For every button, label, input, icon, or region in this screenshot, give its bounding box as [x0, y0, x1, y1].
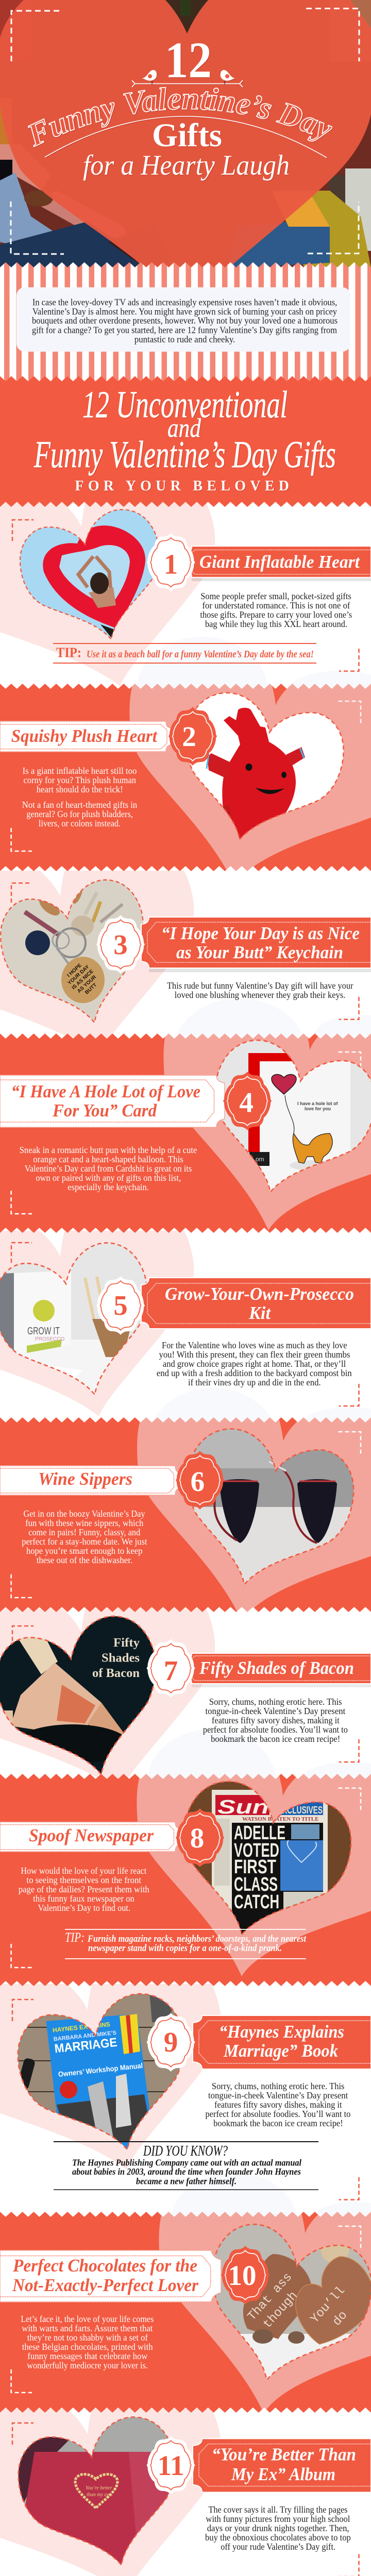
photo: heart chocolates — [206, 2215, 371, 2380]
ribbon title: Perfect Chocolates for the — [12, 2256, 197, 2276]
photo: spoof newspaper: CLASS — [234, 1874, 278, 1895]
body text: and grow choice grapes right at home. That, or they’ll — [163, 1359, 346, 1369]
ribbon — [0, 1075, 225, 1127]
tip callout: newspaper stand with copies for a one-of-a-kind prank. — [88, 1943, 282, 1954]
ribbon title: Spoof Newspaper — [29, 1825, 154, 1845]
photo: Haynes marriage manual: BARBARA AND MIKE’S — [53, 2030, 117, 2043]
headline text: and — [167, 414, 201, 443]
body text: corny for you? This plush human — [24, 775, 136, 785]
photo: grow-it prosecco box: GROW IT — [27, 1326, 60, 1337]
photo: bacon book cover — [0, 1616, 155, 1774]
body text — [22, 766, 137, 828]
badge 6 — [176, 1451, 224, 1510]
photo: heart chocolates: do — [330, 2309, 350, 2329]
photo: spoof newspaper: Sun — [217, 1797, 269, 1818]
body text: heart should do the trick! — [37, 784, 123, 794]
ribbon title — [161, 923, 360, 962]
body text: days or your drunk nights together. Then, — [207, 2523, 349, 2533]
photo: spoof newspaper: FIRST — [234, 1856, 276, 1878]
body text: with funny pictures from your high school — [206, 2514, 350, 2524]
ribbon — [0, 721, 171, 752]
body text: own or paired with any of gifts on this list, — [36, 1173, 181, 1183]
body text: those gifts. Prepare to carry your loved one’s — [200, 609, 352, 620]
body text: you! With this present, they can flex their green thumbs — [159, 1349, 350, 1360]
section 7: Fifty Shades of Bacon — [0, 1607, 371, 1832]
photo: spoof newspaper: ADELLE — [234, 1822, 285, 1844]
body text: How would the love of your life react — [21, 1866, 146, 1876]
headline text: FOR YOUR BELOVED — [75, 478, 289, 494]
body text: funny messages that celebrate how — [27, 2351, 147, 2361]
ribbon title — [12, 2256, 198, 2295]
badge 8: 8 — [190, 1822, 204, 1854]
photo: grow-it prosecco box — [0, 1242, 147, 1395]
hero title — [28, 31, 333, 181]
photo: red album: You’re better — [86, 2485, 112, 2491]
photo: Haynes marriage manual: MARRIAGE — [54, 2036, 118, 2056]
ribbon title: Kit — [248, 1303, 271, 1323]
body text: fun with these wine sippers, which — [25, 1518, 143, 1528]
tip callout: Use it as a beach ball for a funny Valentine’s Day date by the sea! — [87, 649, 314, 660]
photo: spoof newspaper: WATSON BEATEN TO TITLE — [242, 1816, 318, 1822]
body text: tongue-in-cheek Valentine’s Day present — [208, 2090, 348, 2100]
ribbon title: My Ex” Album — [231, 2464, 335, 2484]
photo: wooden keychain — [0, 879, 144, 1023]
tip callout: TIP: — [56, 645, 81, 660]
stripes: top background — [0, 258, 371, 386]
photo: wine sipper glasses — [192, 1428, 355, 1585]
photo: wooden keychain: YOUR DAY — [67, 964, 91, 986]
body text: for understated romance. This is not one of — [202, 600, 350, 611]
arched script title: Funny Valentine’s Day — [28, 87, 333, 148]
did you know callout: became a new father himself. — [136, 2176, 237, 2187]
photo: heart chocolates: You’ll — [308, 2284, 348, 2326]
badge 4: 4 — [239, 1087, 254, 1118]
tip callout — [65, 1929, 307, 1959]
body text: This rude but funny Valentine’s Day gift will have your — [167, 980, 353, 991]
body text: these Belgian chocolates, printed with — [22, 2342, 153, 2352]
body text: especially the keychain. — [68, 1182, 149, 1192]
body text: buy the obnoxious chocolates above to top — [205, 2532, 351, 2543]
badge 4 — [223, 1072, 272, 1130]
ribbon title: Wine Sippers — [38, 1469, 132, 1489]
badge 11 — [146, 2436, 195, 2495]
body text: perfect for a stay-home date. We just — [22, 1536, 147, 1547]
did you know callout — [54, 2141, 318, 2190]
photo: cat card: love for you — [305, 1106, 331, 1111]
photo: bacon book cover: of Bacon — [92, 1667, 140, 1680]
body text — [200, 591, 352, 629]
ribbon — [193, 2015, 371, 2069]
ribbon — [0, 1822, 179, 1852]
section 5: prosecco kit — [0, 1231, 371, 1491]
ribbon title: Grow-Your-Own-Prosecco — [165, 1284, 354, 1304]
section 11: You're Better Than My Ex album — [0, 2409, 371, 2576]
ribbon title: as Your Butt” Keychain — [176, 942, 343, 962]
body text — [205, 2081, 350, 2128]
ribbon title: “Haynes Explains — [219, 2022, 344, 2042]
headline band — [0, 376, 371, 507]
did you know callout: DID YOU KNOW? — [143, 2143, 228, 2159]
intro text: puntastic to rude and cheeky. — [134, 334, 235, 344]
body text: loved one blushing whenever they grab their keys. — [175, 990, 345, 1000]
body text: features fifty savory dishes, making it — [212, 1715, 340, 1725]
photo: wooden keychain: BUTT — [84, 982, 98, 995]
intro text: In case the lovey-dovey TV ads and increasingly expensive roses haven’t made it obvious, — [32, 297, 337, 307]
body text: Sorry, chums, nothing erotic here. This — [212, 2081, 344, 2091]
body text: they’re not too shabby with a set of — [27, 2332, 148, 2343]
tip callout — [53, 643, 316, 664]
intro text: gift for a change? To get you started, here are 12 funny Valentine’s Day gifts ranging from — [32, 325, 337, 335]
body text — [205, 2504, 351, 2552]
ribbon — [0, 2250, 221, 2302]
body text: end up with a fresh addition to the backyard compost bin — [157, 1368, 352, 1378]
body text — [203, 1697, 348, 1744]
photo: red album — [18, 2416, 170, 2565]
photo: woman holding inflatable heart — [20, 509, 158, 639]
ribbon title: Not-Exactly-Perfect Lover — [12, 2275, 198, 2295]
photo: Haynes marriage manual: Owners’ Workshop Manual — [58, 2061, 143, 2078]
section 2: Squishy Plush Heart — [0, 684, 371, 871]
section 9: Haynes book — [0, 1984, 371, 2276]
ribbon title — [212, 2445, 356, 2484]
ribbon — [187, 546, 371, 581]
body text: general? Go for plush bladders, — [26, 809, 133, 819]
photo: wooden keychain: I HOPE — [66, 962, 83, 978]
photo: heart chocolates: That ass — [245, 2270, 295, 2324]
ribbon title: “You’re Better Than — [212, 2445, 356, 2465]
ribbon title: “I Hope Your Day is as Nice — [161, 923, 360, 943]
body text: with warts and farts. Assure them that — [22, 2323, 153, 2333]
hero dashed corner frames — [11, 8, 359, 254]
body text: bag while they lug this XXL heart around. — [205, 619, 347, 629]
branch with two birds — [132, 70, 243, 87]
photo: Haynes marriage manual — [17, 1993, 180, 2149]
badge 5: 5 — [113, 1290, 128, 1321]
ribbon title: Squishy Plush Heart — [11, 726, 158, 746]
body text: orange cat and a heart-shaped balloon. This — [33, 1154, 183, 1164]
ribbon title — [165, 1284, 354, 1323]
photo: Haynes marriage manual: HAYNES EXPLAINS — [52, 2021, 110, 2034]
ribbon title — [12, 1085, 200, 1117]
body text: livers, or colons instead. — [39, 818, 121, 828]
body text — [20, 1145, 197, 1192]
body text: The cover says it all. Try filling the pages — [208, 2504, 347, 2515]
section 3: keychain — [0, 871, 371, 1104]
badge 5 — [96, 1276, 145, 1335]
body text: bookmark the bacon ice cream recipe! — [213, 2118, 343, 2128]
body text — [167, 980, 353, 1000]
body text — [19, 1866, 149, 1913]
body text: if their vines dry up and die in the end. — [188, 1377, 321, 1387]
section 1: Giant Inflatable Heart — [0, 501, 371, 740]
photo: wooden keychain: IS AS NICE — [71, 969, 95, 991]
photo: spoof newspaper: VOTED — [234, 1840, 279, 1861]
tip callout: TIP: — [65, 1930, 85, 1945]
photo: cat card: I have a hole lot of — [297, 1101, 339, 1106]
headline text — [33, 384, 336, 494]
intro text: Valentine’s Day is almost here. You might have grown sick of burning your cash on pricey — [32, 306, 337, 316]
photo: spoof newspaper — [187, 1781, 351, 1935]
photo: spoof newspaper: CATCH — [234, 1891, 279, 1913]
did you know callout: The Haynes Publishing Company came out with an actual manual — [72, 2157, 301, 2167]
hero heart overlay — [0, 0, 371, 267]
intro text — [32, 297, 338, 344]
badge 7: 7 — [164, 1655, 178, 1686]
badge 9: 9 — [164, 2026, 178, 2058]
badge 10: 10 — [228, 2260, 257, 2291]
body text: perfect for absolute foodies. You’ll want to — [203, 1724, 348, 1735]
section 10: Perfect Chocolates — [0, 2202, 371, 2413]
ribbon — [0, 1466, 179, 1495]
body text: bookmark the bacon ice cream recipe! — [211, 1734, 340, 1744]
body text: perfect for absolute foodies. You’ll want to — [205, 2109, 350, 2119]
for a Hearty Laugh: for a Hearty Laugh — [83, 149, 290, 181]
body text: Some people prefer small, pocket-sized gifts — [200, 591, 351, 601]
photo: spoof newspaper: XCLUSIVES — [282, 1805, 323, 1816]
ribbon title — [219, 2022, 344, 2061]
badge 3 — [96, 915, 145, 974]
Gifts: Gifts — [152, 117, 222, 154]
ribbon — [193, 2438, 371, 2493]
ribbon — [141, 1278, 371, 1329]
photo: cat card: om — [256, 1156, 264, 1163]
body text: page of the dailies? Present them with — [19, 1884, 149, 1894]
ribbon title: Giant Inflatable Heart — [199, 552, 360, 572]
photo: cat card — [216, 1040, 371, 1192]
body text: wonderfully mediocre your lover is. — [27, 2360, 148, 2370]
hero photo: couple exchanging gift — [0, 0, 371, 268]
body text: Valentine’s Day to find out. — [38, 1903, 130, 1913]
badge 10 — [221, 2246, 269, 2304]
body text: For the Valentine who loves wine as much as they love — [162, 1340, 347, 1350]
ribbon title: For You” Card — [52, 1100, 157, 1121]
body text: Sneak in a romantic butt pun with the help of a cute — [20, 1145, 197, 1155]
body text: come in pairs! Funny, classy, and — [28, 1527, 140, 1537]
section 6: Wine Sippers — [0, 1410, 371, 1621]
body text — [22, 1509, 147, 1565]
tip callout: Furnish magazine racks, neighbors’ doorsteps, and the nearest — [87, 1934, 307, 1944]
body text: Is a giant inflatable heart still too — [23, 766, 137, 776]
photo: grow-it prosecco box: PROSECCO — [35, 1336, 64, 1342]
badge 9 — [146, 2013, 195, 2072]
badge 3: 3 — [113, 929, 128, 960]
body text: features fifty savory dishes, making it — [214, 2099, 342, 2110]
body text — [21, 2314, 154, 2370]
badge 11: 11 — [158, 2450, 184, 2481]
badge 2: 2 — [182, 721, 196, 752]
badge 7 — [146, 1639, 195, 1698]
arc rule — [45, 116, 327, 158]
intro text: bouquets and other overdone presents, however. Why not buy your loved one a humorous — [32, 315, 338, 326]
photo: heart chocolates: though — [261, 2289, 301, 2331]
ribbon title: Marriage” Book — [223, 2041, 338, 2061]
badge 6: 6 — [191, 1466, 205, 1497]
photo: plush human heart — [190, 692, 344, 840]
body text: tongue-in-cheek Valentine’s Day present — [205, 1706, 345, 1716]
section 8: Spoof Newspaper — [0, 1765, 371, 1986]
body text: Valentine’s Day card from Cardshit is great on its — [25, 1163, 192, 1174]
ribbon title: Fifty Shades of Bacon — [199, 1658, 354, 1678]
body text: this funny faux newspaper on — [33, 1893, 134, 1904]
did you know callout: about babies in 2003, around the time when founder John Haynes — [72, 2166, 301, 2177]
photo: bacon book cover: Shades — [102, 1652, 140, 1665]
body text: to seeing themselves on the front — [26, 1875, 141, 1885]
body text: Not a fan of heart-themed gifts in — [22, 800, 137, 810]
intro panel — [16, 287, 350, 352]
body text — [157, 1340, 352, 1387]
badge 1 — [146, 533, 195, 591]
body text: these out of the dishwasher. — [37, 1555, 132, 1565]
body text: Sorry, chums, nothing erotic here. This — [209, 1697, 342, 1707]
ribbon title: “I Have A Hole Lot of Love — [11, 1081, 200, 1101]
photo: red album: than my ex... — [87, 2492, 113, 2498]
hero panel — [0, 0, 371, 268]
body text: off your rude Valentine’s Day gift. — [221, 2541, 335, 2552]
photo: bacon book cover: Fifty — [113, 1636, 140, 1650]
body text: hope you’re smart enough to keep — [26, 1546, 142, 1556]
photo: wooden keychain: AS YOUR — [76, 974, 98, 994]
title number 12: 12 — [165, 31, 212, 89]
body text: Let’s face it, the love of your life comes — [21, 2314, 154, 2324]
badge 1: 1 — [164, 548, 178, 580]
badge 8 — [176, 1808, 224, 1867]
ribbon — [141, 917, 371, 972]
badge 2 — [168, 707, 217, 766]
ribbon — [187, 1653, 371, 1687]
headline text: 12 Unconventional — [82, 384, 288, 426]
section 4: Hole Lot of Love card — [0, 1019, 371, 1233]
body text: Get in on the boozy Valentine’s Day — [24, 1509, 145, 1519]
